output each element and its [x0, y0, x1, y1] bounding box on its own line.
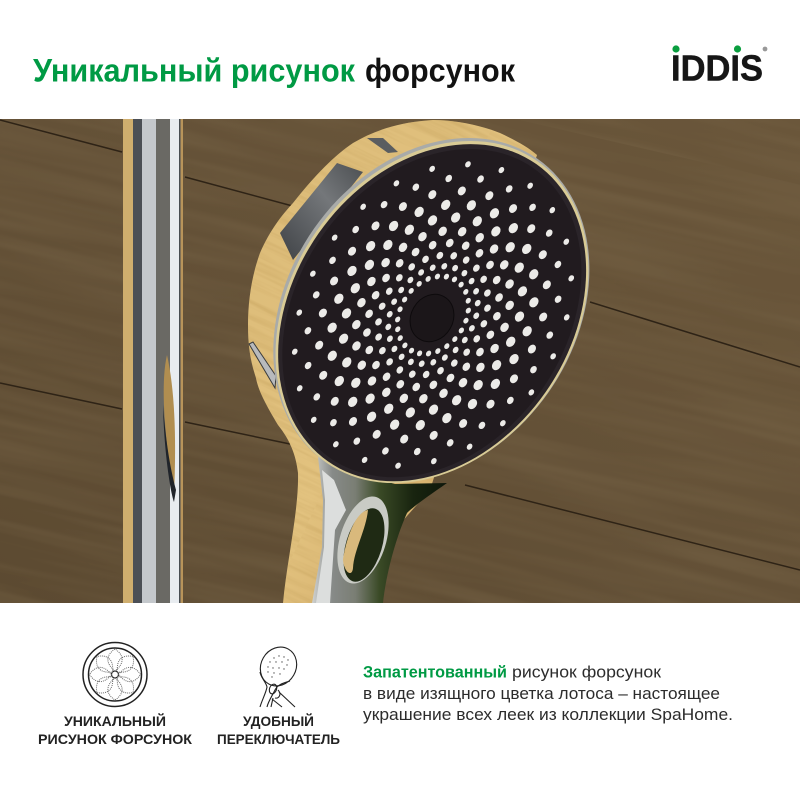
description text	[363, 662, 733, 724]
chrome handle	[312, 457, 447, 603]
description text: в виде изящного цветка лотоса – настоящее	[363, 684, 720, 703]
label: unique nozzle pattern: РИСУНОК ФОРСУНОК	[38, 731, 192, 747]
title: форсунок	[365, 52, 516, 88]
label: convenient switch: ПЕРЕКЛЮЧАТЕЛЬ	[217, 731, 340, 747]
title: Уникальный рисунок	[33, 52, 356, 88]
label: unique nozzle pattern	[38, 712, 192, 747]
label: convenient switch: УДОБНЫЙ	[243, 712, 314, 729]
description text: украшение всех леек из коллекции SpaHome.	[363, 705, 733, 724]
description text: рисунок форсунок	[512, 662, 662, 682]
nozzle dot pattern	[292, 161, 574, 469]
shower face	[273, 138, 590, 483]
chrome rim	[273, 138, 590, 476]
description text: Запатентованный	[363, 662, 507, 682]
photo: shower head on wooden wall	[0, 77, 800, 603]
icon: hand shower with switch	[253, 640, 304, 707]
handle switch button	[337, 496, 389, 584]
label: convenient switch	[217, 712, 340, 747]
chrome rail	[123, 119, 183, 603]
icon: lotus nozzle pattern	[83, 642, 147, 706]
wooden wall background	[0, 119, 800, 603]
black nozzle plate	[278, 144, 586, 482]
shower head wooden reflection body	[248, 120, 537, 603]
chrome reflections on head	[249, 138, 398, 388]
center button	[410, 294, 454, 342]
logo: IDDIS: IDDIS	[671, 48, 763, 88]
label: unique nozzle pattern: УНИКАЛЬНЫЙ	[64, 712, 166, 729]
